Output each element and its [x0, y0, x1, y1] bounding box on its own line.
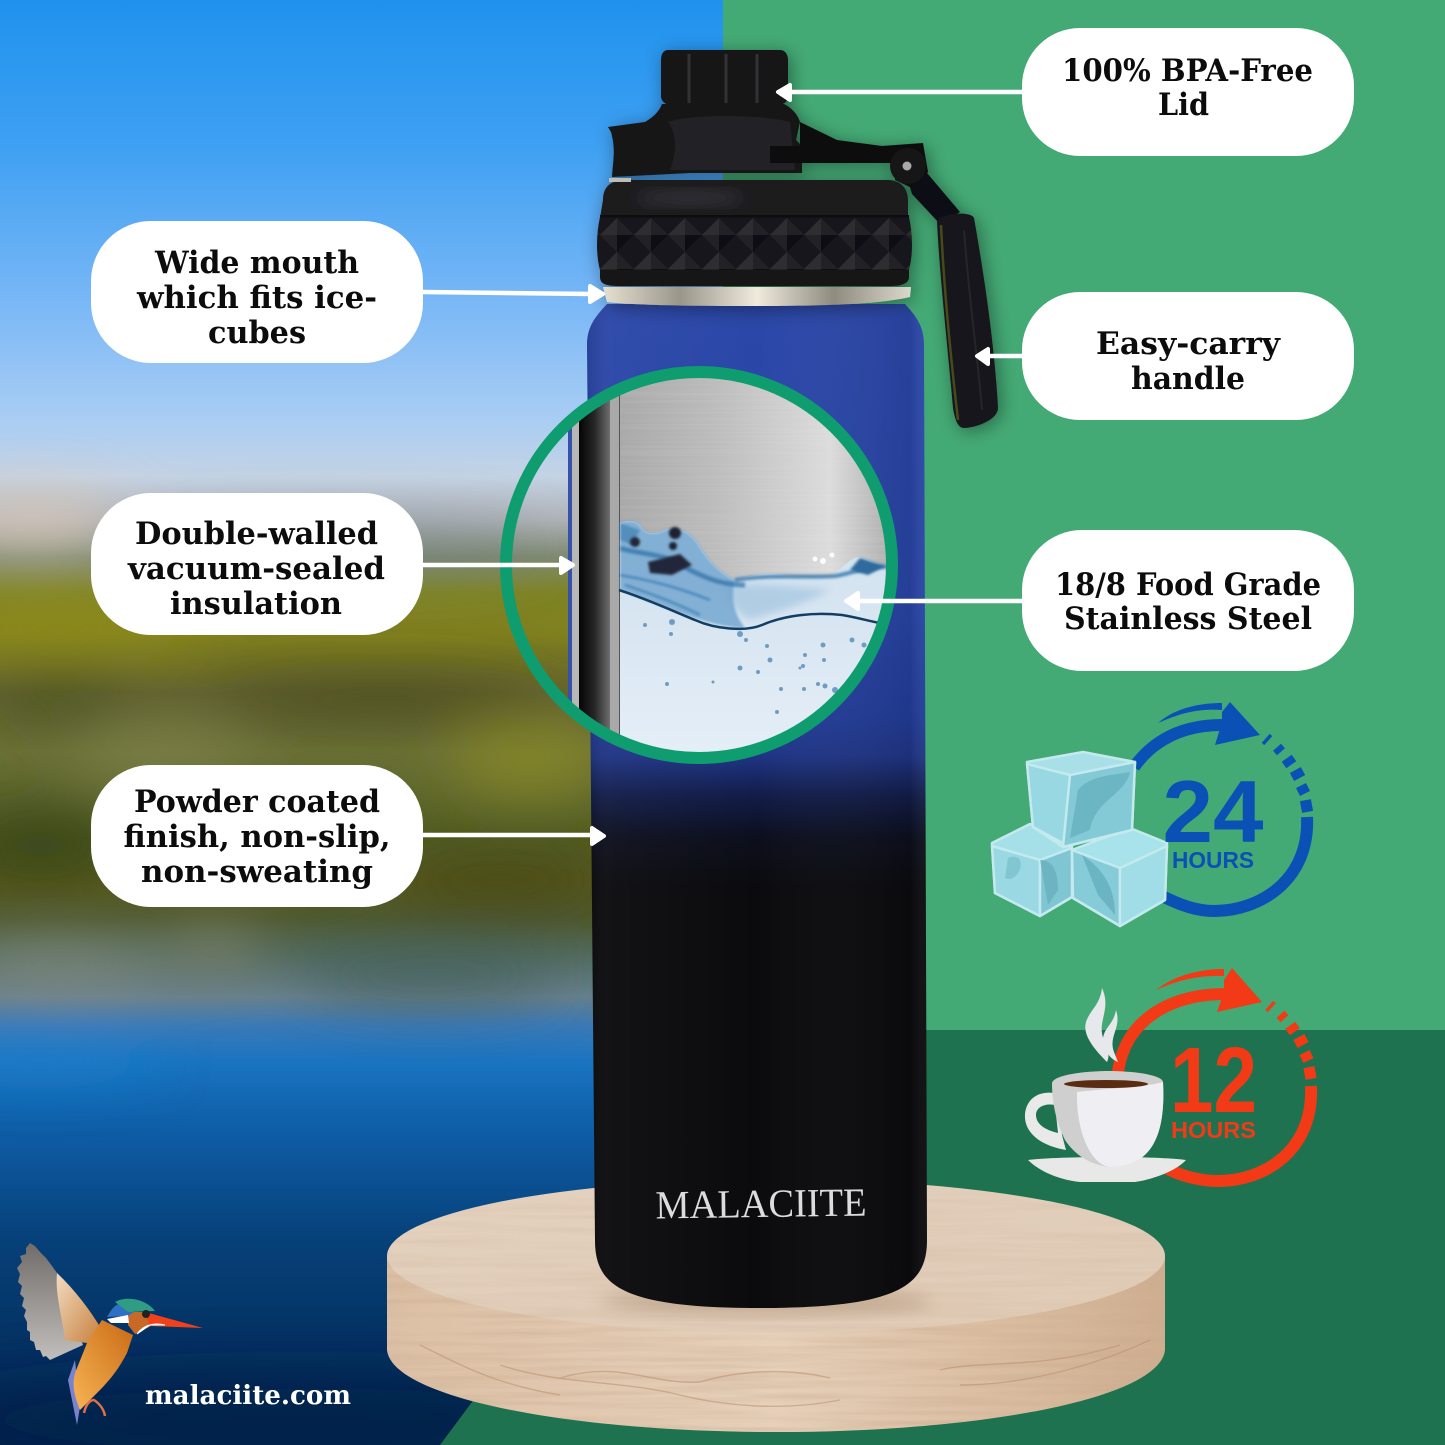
callout: wide mouth: cubes: [208, 315, 306, 351]
cap knob: [661, 50, 788, 105]
arrow: handle: [977, 349, 1022, 364]
callout: double wall: insulation: [170, 586, 342, 622]
12 label: 12: [1170, 1028, 1257, 1132]
carry handle: [905, 170, 998, 428]
callout: lid: Lid: [1158, 87, 1209, 123]
water body: [620, 521, 890, 770]
lever arm: [770, 122, 928, 188]
hours label: HOURS: [1171, 1117, 1256, 1143]
callout: wide mouth: Wide mouth: [154, 245, 359, 281]
background: blurred lake landscape photo: [0, 0, 724, 1445]
ice cubes: [992, 752, 1167, 926]
bottle outer layers: [568, 428, 572, 702]
hours label: HOURS: [1172, 847, 1254, 873]
soft blue swell under the surface: [725, 584, 830, 620]
bubbles: [643, 619, 867, 714]
timer ring: [1118, 994, 1316, 1181]
arrow: lid: [778, 85, 1022, 100]
background: dark green lower panel: [440, 1030, 1445, 1445]
round wooden platform: [380, 1175, 1170, 1440]
steel interior: [620, 378, 886, 580]
arrow: stainless steel: [846, 593, 1022, 609]
website address: malaciite.com: [145, 1381, 351, 1411]
callout: double wall: vacuum-sealed: [127, 551, 385, 587]
callout: lid: 100% BPA-Free: [1062, 53, 1313, 89]
hinge pivot: [890, 148, 926, 184]
callout: stainless steel: Stainless Steel: [1064, 601, 1312, 637]
timer ring: [1134, 725, 1312, 911]
callout: stainless steel: 18/8 Food Grade: [1055, 567, 1321, 603]
badge: 24 hours cold: [992, 702, 1312, 926]
background: green panel: [723, 0, 1445, 1445]
magnified cutaway: stainless steel wall and water: [506, 360, 900, 770]
neck ring: [603, 287, 911, 306]
callout: powder coat: [91, 765, 423, 907]
callout: powder coat: non-sweating: [141, 854, 373, 890]
callout: wide mouth: [91, 221, 423, 363]
bottle shadow on platform: [600, 1290, 930, 1314]
badge: 12 hours hot: [1025, 968, 1316, 1182]
brand name on bottle: MALACIITE: [655, 1180, 867, 1227]
callout: wide mouth: which fits ice-: [136, 280, 377, 316]
callout: powder coat: finish, non-slip,: [124, 819, 390, 855]
coffee cup: [1025, 988, 1186, 1182]
callout: double wall: [91, 493, 423, 635]
arrow: wide mouth: [423, 286, 603, 302]
callout: handle: Easy-carry: [1096, 326, 1281, 362]
waterline: [619, 590, 885, 629]
24 label: 24: [1162, 762, 1264, 861]
splash shading: [620, 521, 888, 628]
dark splash reflections: [630, 527, 886, 575]
bottle: [587, 304, 927, 1308]
lid collar: [600, 180, 908, 218]
callout: stainless steel: [1022, 530, 1354, 671]
bottle lid and handle: [597, 50, 998, 428]
bottle body: [587, 304, 927, 1308]
vacuum wall: [579, 400, 610, 730]
callout: lid: [1022, 28, 1354, 156]
logo: kingfisher bird: [17, 1243, 203, 1425]
cap base and wing: [608, 104, 802, 177]
callout: handle: [1022, 292, 1354, 420]
lens ring: [506, 372, 892, 758]
callout: handle: handle: [1131, 361, 1245, 397]
callout: double wall: Double-walled: [135, 516, 378, 552]
callout: powder coat: Powder coated: [134, 784, 380, 820]
arrow: double wall: [423, 558, 573, 573]
arrow: powder coat: [423, 828, 604, 844]
